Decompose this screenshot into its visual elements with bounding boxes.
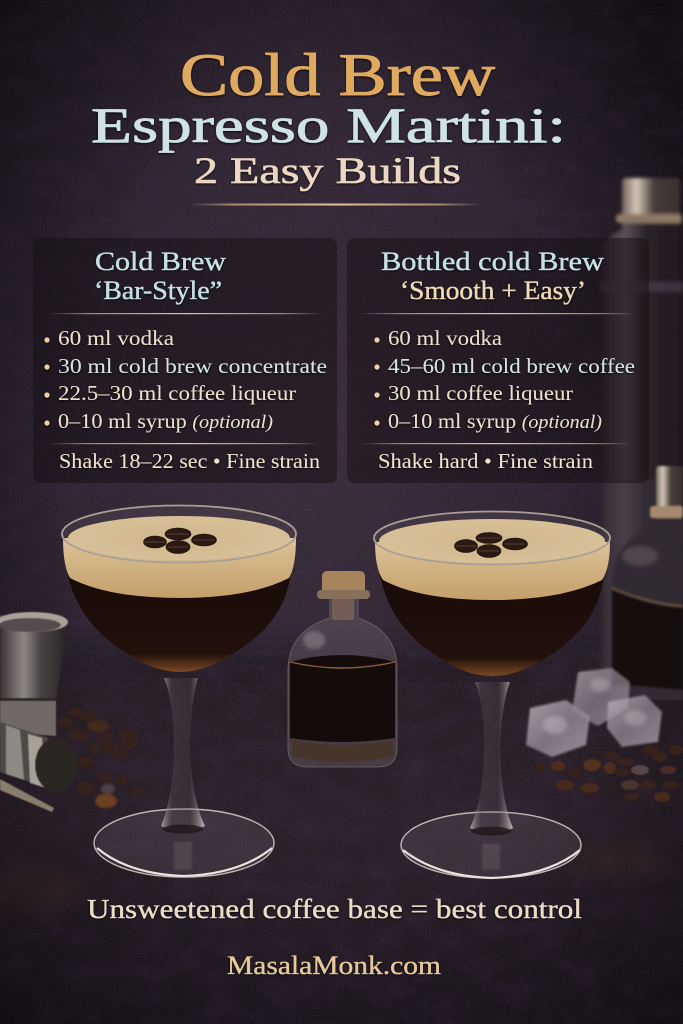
large background bottle [600, 178, 683, 692]
ingredient list [44, 326, 327, 433]
website credit: MasalaMonk.com [227, 951, 441, 980]
panel heading: Cold Brew [95, 247, 226, 276]
ingredient list: 30 ml cold brew concentrate [58, 354, 327, 378]
title: Cold Brew [180, 42, 496, 108]
shake instruction: Shake 18–22 sec • Fine strain [59, 449, 321, 473]
glass base [94, 809, 274, 877]
liquid [380, 575, 604, 676]
glass rim [374, 512, 610, 564]
title: 2 Easy Builds [194, 151, 461, 192]
coffee beans left [57, 707, 143, 808]
glass rim [62, 506, 296, 562]
panel heading: Bottled cold Brew [381, 247, 604, 276]
panel heading [381, 247, 604, 305]
ingredient list: 22.5–30 ml coffee liqueur [58, 381, 296, 405]
foam top [379, 519, 605, 563]
panel: cold brew bar-style recipe [33, 238, 337, 483]
tagline: Unsweetened coffee base = best control [87, 894, 582, 924]
glass stem [470, 682, 513, 834]
left espresso martini glass [62, 506, 296, 877]
title [91, 42, 566, 192]
glass stem [161, 678, 205, 832]
ingredient list: 30 ml coffee liqueur [388, 381, 573, 405]
ingredient list: 60 ml vodka [388, 326, 503, 350]
panel heading: ‘Smooth + Easy’ [400, 276, 586, 305]
coffee beans garnish [144, 528, 216, 554]
panel heading: ‘Bar-Style” [94, 276, 222, 305]
title: Espresso Martini: [91, 97, 566, 153]
ingredient list: 60 ml vodka [58, 326, 175, 350]
shake instruction: Shake hard • Fine strain [378, 449, 594, 473]
ingredient list: 0–10 ml syrup (optional) [58, 409, 273, 433]
ingredient list: 0–10 ml syrup (optional) [388, 409, 602, 433]
ingredient list [374, 326, 635, 433]
panel: bottled cold brew smooth and easy recipe [347, 238, 649, 483]
ice cubes [526, 668, 662, 757]
coffee beans right [534, 745, 683, 802]
liquid [67, 572, 291, 672]
cocktail shaker lying down and spoon [0, 722, 77, 812]
foam top [68, 516, 290, 560]
small background bottle [612, 466, 683, 700]
glass base [401, 812, 581, 878]
coffee beans garnish [454, 532, 528, 558]
center syrup bottle with cork [288, 571, 397, 767]
panel heading [94, 247, 226, 305]
right espresso martini glass [374, 512, 610, 878]
foam side [375, 542, 610, 600]
foam side [63, 538, 296, 598]
ingredient list: 45–60 ml cold brew coffee [388, 354, 635, 378]
jigger [0, 612, 68, 736]
